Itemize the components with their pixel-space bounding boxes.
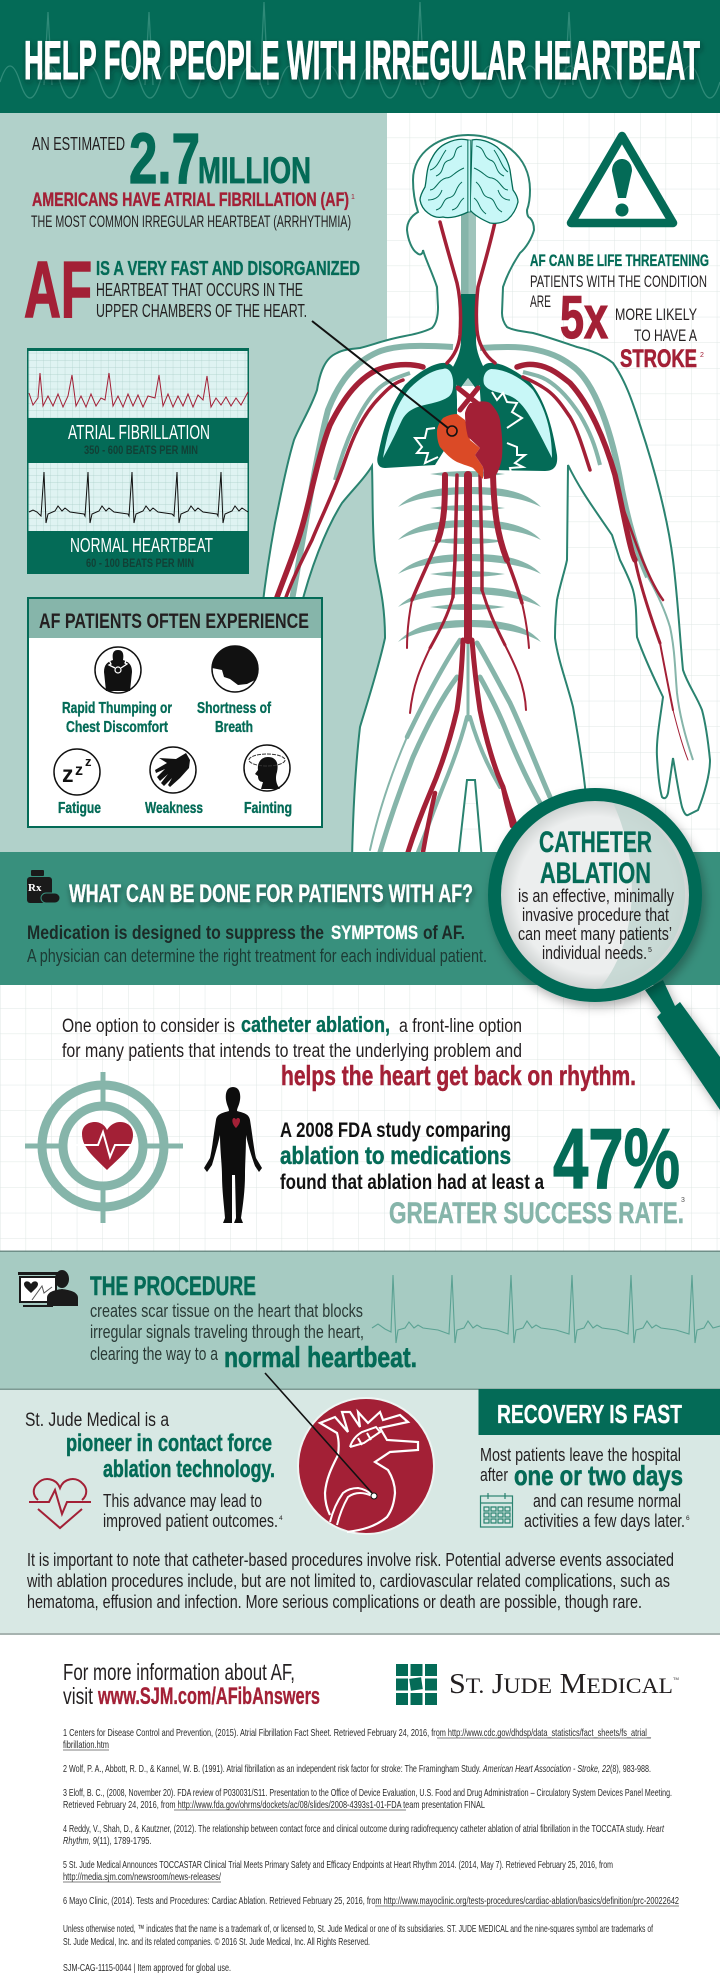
text block: St. Jude pioneer: This advance may lead to [103,1491,262,1511]
panel: left teal background [0,113,387,853]
stat: 47 percent: 47% [553,1112,680,1207]
symptom labels: Breath [215,719,253,736]
icon: human silhouette [204,1087,262,1223]
references: Retrieved February 24, 2016, from http://www.fda.gov/ohrms/dockets/ac/08/slides/2008-4393s1-01-FDA team presentation FINAL [63,1799,485,1811]
text block: St. Jude pioneer: St. Jude Medical is a [25,1410,169,1431]
medication text: A physician can determine the right treatment for each individual patient. [27,946,487,966]
text block: St. Jude pioneer: pioneer in contact force [66,1430,272,1457]
text block: catheter ablation option: a front-line option [399,1016,522,1037]
icon: fatigue: z [85,754,92,769]
text block: 2.7 million statistic [31,120,355,231]
lens text: 5 [648,947,652,954]
magnifier handle [645,980,720,1110]
symptom labels [58,700,292,817]
lungs [377,363,457,468]
text block: procedure: normal heartbeat. [224,1342,417,1374]
text block: more information: For more information about AF, [63,1659,295,1685]
lens text: individual needs. [542,943,647,963]
icon: target with heart [25,1072,183,1223]
icon: fatigue: z [75,762,83,779]
text block: recovery: 6 [686,1515,690,1522]
text block: catheter ablation option: catheter ablation, [241,1012,390,1037]
text block: stroke risk: TO HAVE A [634,326,697,345]
icon: warning triangle [571,136,673,223]
icon: fatigue [54,749,100,795]
text block: procedure: THE PROCEDURE [90,1271,256,1301]
medication text: of AF. [423,923,465,944]
medication text: SYMPTOMS [331,923,418,944]
medication text: Medication is designed to suppress the [27,923,324,944]
panel: technology and recovery [0,1373,720,1635]
text block: St. Jude pioneer [25,1410,283,1531]
text block: procedure: clearing the way to a [90,1344,219,1364]
lens text: ABLATION [540,857,651,890]
panel: AF patients often experience [28,598,322,827]
panel: the procedure [0,1250,720,1389]
text block: FDA study: A 2008 FDA study comparing [280,1119,511,1142]
text block: more information: visit [63,1683,93,1709]
text block: more information: www.SJM.com/AFibAnswers [97,1683,320,1710]
label: atrial fibrillation: ATRIAL FIBRILLATION [68,422,210,444]
brain [420,139,518,223]
legal note: SJM-CAG-1115-0044 | Item approved for global use. [63,1962,231,1974]
icon: chest thumping [95,647,141,693]
logo: St. Jude Medical: TM [673,1676,679,1681]
text block: stroke risk: 2 [700,352,704,359]
icon: magnifying glass callout [494,794,720,1110]
icon: Rx bottle [27,870,60,903]
symptom labels: Shortness of [197,700,272,717]
chart: atrial fibrillation trace [29,373,248,407]
chart: normal heartbeat trace [29,472,248,523]
references: 2 Wolf, P. A., Abbott, R. D., & Kannel, W. B. (1991). Atrial fibrillation as an independent risk factor for stroke: The Framingham Study. American Heart Association - Stroke, 22(8), 983-988. [63,1763,651,1775]
panel: ECG comparison: 60 - 100 BEATS PER MIN [86,558,194,570]
text block: 2.7 million statistic: 1 [351,194,355,201]
panel: ECG comparison [27,348,249,574]
references: fibrillation.htm [63,1739,109,1751]
icon: weakness [150,747,196,793]
symptom labels: Weakness [145,800,203,817]
lens text: is an effective, minimally [518,886,674,906]
header ecg line [0,2,720,98]
recovery heading [478,1389,720,1435]
heading: WHAT CAN BE DONE FOR PATIENTS WITH AF? [69,880,473,908]
references: http://media.sjm.com/newsroom/news-releases/ [63,1871,221,1883]
symptom labels: Chest Discomfort [66,719,168,736]
lens text [518,826,674,963]
text block: stroke risk: 5x [560,284,608,351]
heart [437,414,483,479]
text block: more information [63,1659,320,1710]
icon: heart pulse outline [29,1479,91,1528]
ribs [398,471,541,642]
text block: recovery: after [480,1465,508,1485]
text block: procedure: creates scar tissue on the heart that blocks [90,1301,363,1321]
chart: ecg background [372,1275,720,1343]
text block: FDA study: found that ablation had at least a [280,1171,544,1194]
text block: recovery: and can resume normal [533,1491,681,1511]
legal note [63,1923,653,1974]
text block: recovery [480,1445,690,1531]
text block: 2.7 million statistic: 2.7 [129,120,200,199]
text block: risk note [26,1550,674,1612]
text block: catheter ablation option: One option to consider is [62,1016,235,1037]
text block: 2.7 million statistic: AN ESTIMATED [32,134,125,154]
header band [0,0,720,113]
text block: catheter ablation option: for many patients that intends to treat the underlying problem and [62,1041,522,1062]
icon: presenter with screen [18,1270,78,1307]
panel: ECG comparison: 350 - 600 BEATS PER MIN [84,445,198,457]
leg vessels teal [370,630,550,852]
panel: what can be done [0,852,720,985]
text block: catheter ablation option [62,1012,636,1091]
icon: heart with catheter [265,1373,434,1534]
logo: St. Jude Medical: ST. JUDE MEDICAL [449,1669,673,1700]
text block: FDA study [280,1119,544,1194]
lens text: can meet many patients’ [518,924,672,944]
lens text: CATHETER [539,826,652,859]
icon: fainting [244,745,290,791]
symptom labels: Fatigue [58,800,101,817]
symptom labels: Fainting [244,800,292,817]
starburst sparks [415,392,525,477]
text block: AF definition: HEARTBEAT THAT OCCURS IN THE [96,280,303,300]
icon: shortness of breath [212,646,258,692]
references: Rhythm, 9(11), 1789-1795. [63,1835,152,1847]
arm vessels teal [292,346,693,760]
text block: procedure [90,1271,417,1374]
text block: 2.7 million statistic: MILLION [198,150,311,191]
text block: stroke risk [530,251,709,373]
illustration: human body circulatory system [262,135,710,860]
medication text [27,923,487,966]
stat: 47 percent: 3 [681,1197,685,1204]
icon: calendar [480,1493,512,1527]
text block: St. Jude pioneer: improved patient outcomes. [103,1511,278,1531]
text block: AF definition: AF [24,245,92,334]
logo: St. Jude Medical [396,1664,679,1705]
red arteries [276,222,688,852]
text block: AF definition: UPPER CHAMBERS OF THE HEART. [96,301,307,321]
text block: AF definition: IS A VERY FAST AND DISORGANIZED [96,258,360,280]
text block: procedure: irregular signals traveling through the heart, [90,1322,364,1342]
text block: St. Jude pioneer: ablation technology. [103,1456,275,1483]
icon: Rx bottle: Rx [28,882,42,894]
body outline [262,135,710,860]
text block: St. Jude pioneer: 4 [279,1515,283,1522]
text block: FDA study: ablation to medications [280,1142,511,1170]
magnifier lens [494,794,696,996]
panel heading: AF PATIENTS OFTEN EXPERIENCE [39,610,309,633]
lens text: invasive procedure that [522,905,669,925]
text block: AF definition [24,245,360,334]
legal note: St. Jude Medical, Inc. and its related companies. © 2016 St. Jude Medical, Inc. All Rights Reserved. [63,1936,370,1948]
text block: 2.7 million statistic: THE MOST COMMON IRREGULAR HEARTBEAT (ARRHYTHMIA) [31,212,351,231]
text block: stroke risk: ARE [530,292,551,311]
label: normal heartbeat: NORMAL HEARTBEAT [70,535,213,557]
spine [461,212,476,295]
icon: fatigue: z [62,761,74,787]
symptom labels: Rapid Thumping or [62,700,172,717]
pointer line to heart [312,321,457,436]
text block: 2.7 million statistic: AMERICANS HAVE ATRIAL FIBRILLATION (AF) [32,190,349,211]
references [63,1727,679,1907]
stat: 47 percent [389,1112,685,1230]
